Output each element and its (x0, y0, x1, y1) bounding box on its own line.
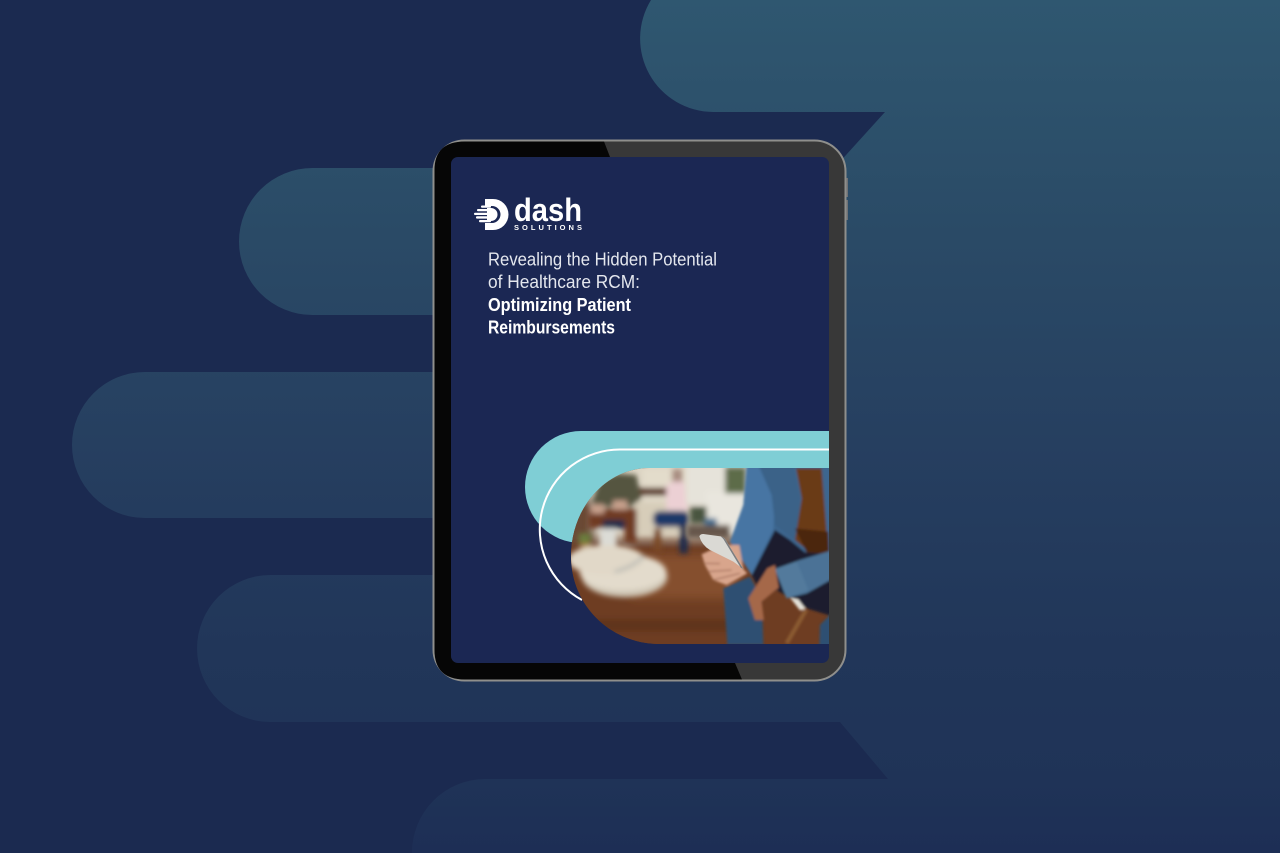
title line 3 bold: Optimizing Patient (488, 295, 631, 315)
photo: person using smartphone in waiting room (571, 468, 829, 644)
teal shape (525, 431, 829, 542)
title line 2: of Healthcare RCM: (488, 272, 640, 292)
tablet frame (434, 140, 846, 680)
logo subtitle: SOLUTIONS (514, 223, 582, 232)
smartphone (699, 534, 743, 569)
logo: dash solutions (474, 198, 582, 230)
title (488, 250, 717, 338)
white outline curve (540, 449, 829, 600)
man and phone in foreground (687, 465, 833, 647)
blurred waiting room (571, 468, 748, 644)
tablet side buttons (845, 178, 848, 220)
tablet device (432, 140, 848, 682)
title line 1: Revealing the Hidden Potential (488, 250, 717, 270)
frame reflection (434, 142, 742, 680)
background furniture behind the man (687, 465, 750, 538)
logo wordmark: dash (514, 192, 582, 228)
title line 4 bold: Reimbursements (488, 318, 615, 338)
logo mark (474, 199, 508, 230)
tablet screen (451, 157, 829, 663)
